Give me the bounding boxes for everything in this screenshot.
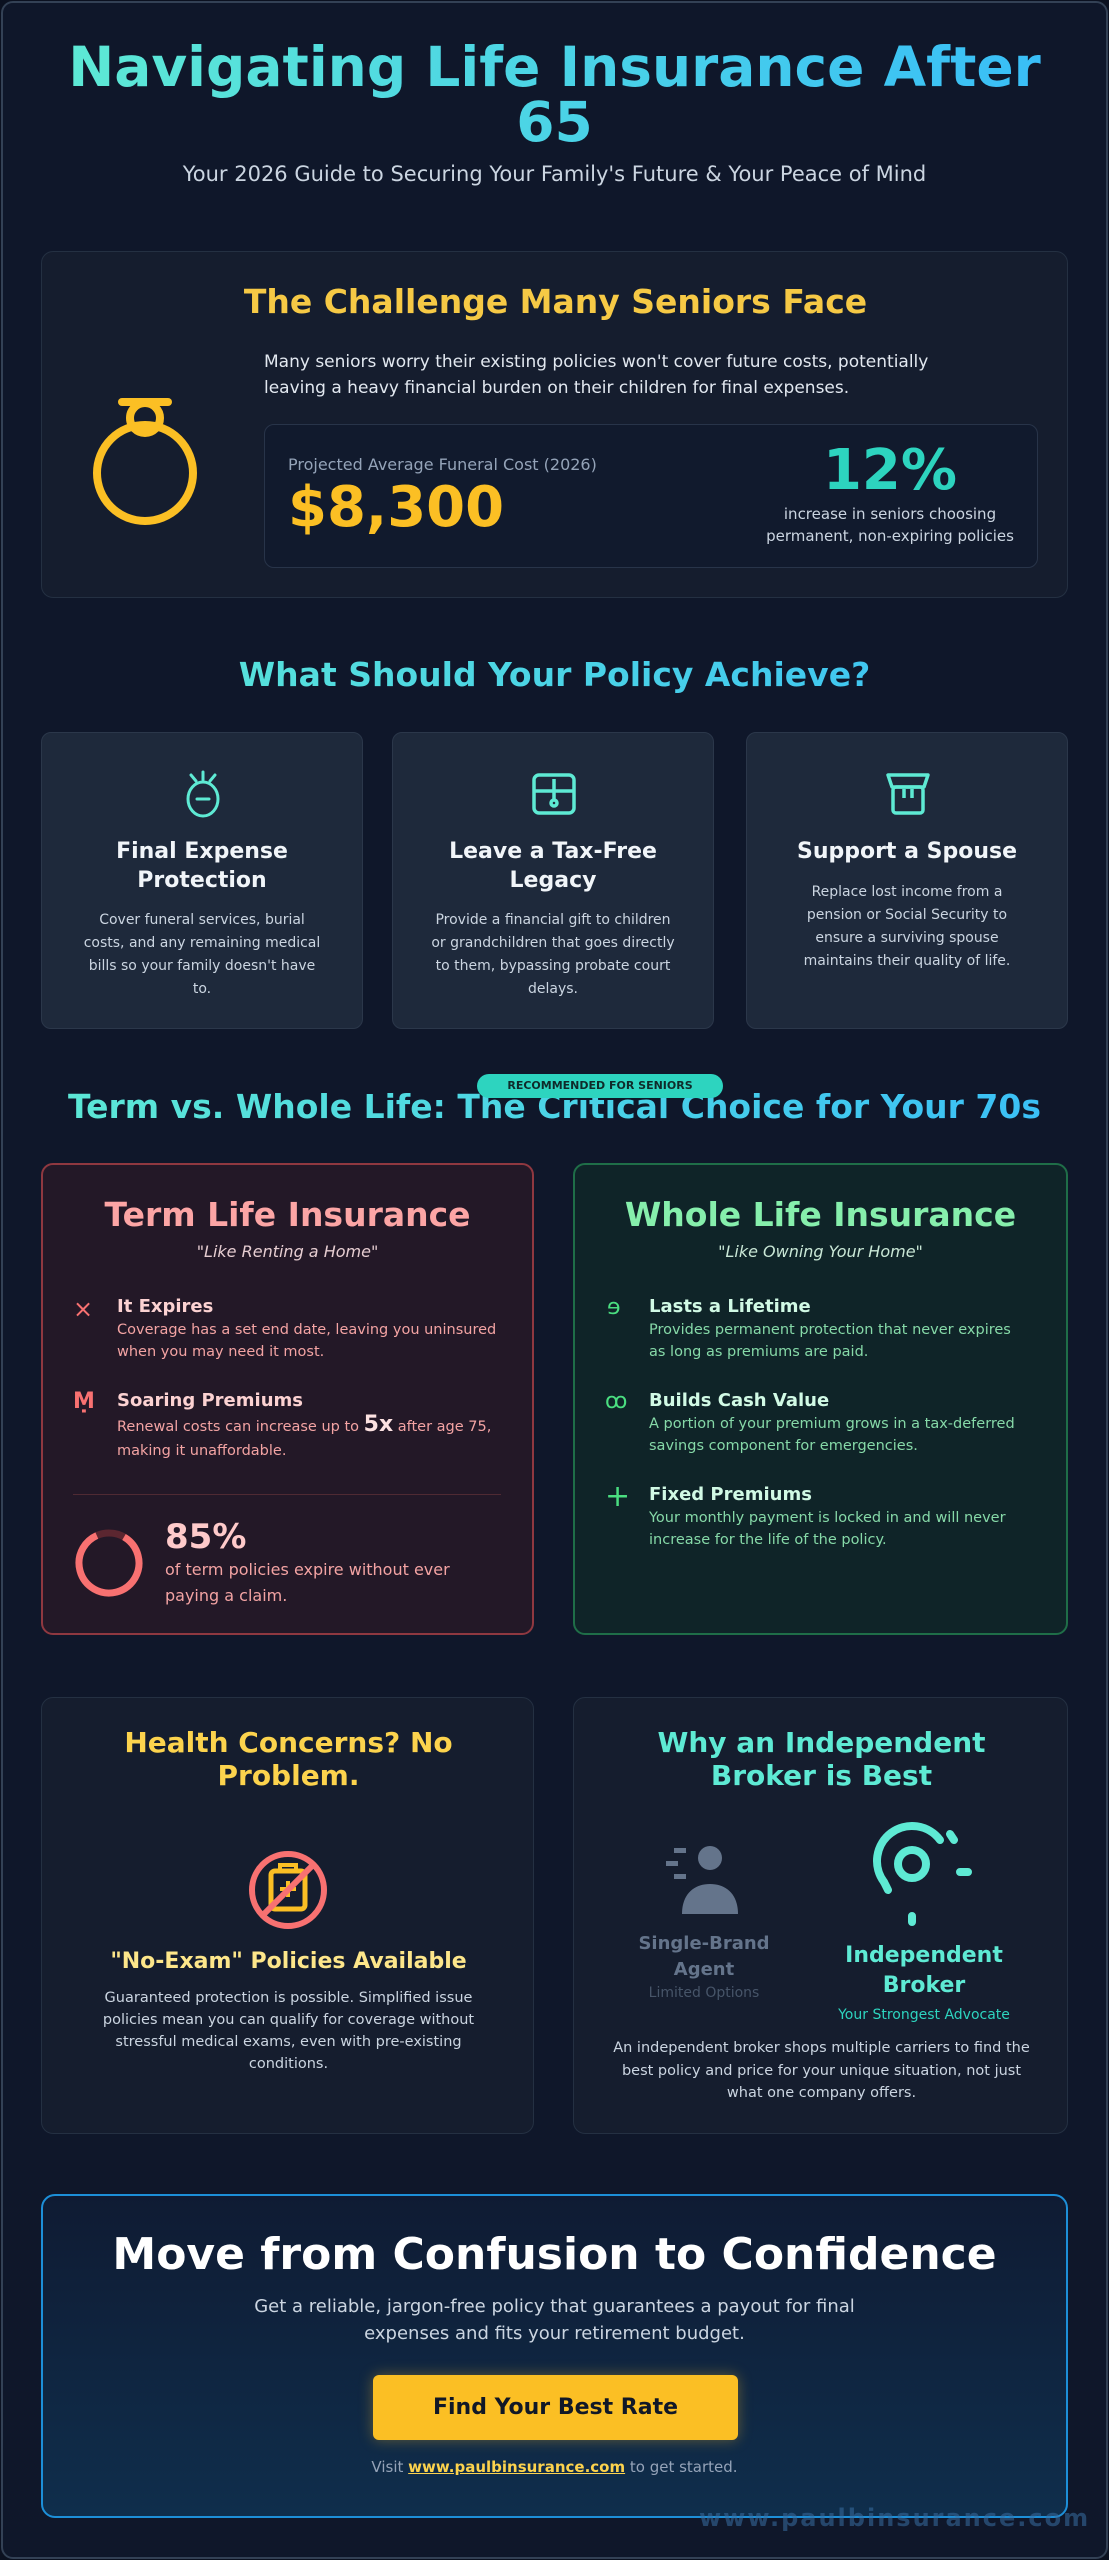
icon: lifetime: ɘ xyxy=(607,1295,621,1320)
heading: whole: Whole Life Insurance xyxy=(625,1195,1016,1234)
heading: term vs whole: Term vs. Whole Life: The Critical Choice for Your 70s xyxy=(68,1087,1041,1126)
stat: funeral cost: $8,300 xyxy=(288,475,504,540)
label: agent: Limited Options xyxy=(649,1985,759,2001)
button xyxy=(373,2375,738,2440)
text: cta: Get a reliable, jargon-free policy that guarantees a payout for final expenses and fits your retirement budget. xyxy=(254,2296,855,2344)
icon: premiums: Ṃ xyxy=(73,1389,95,1414)
stat: funeral cost xyxy=(288,455,597,540)
watermark: www.paulbinsurance.com xyxy=(699,2504,1090,2532)
item: fixed: Your monthly payment is locked in and will never increase for the life of the policy. xyxy=(649,1510,1006,1548)
panel: term life xyxy=(41,1163,534,1635)
badge: recommended: RECOMMENDED FOR SENIORS xyxy=(507,1079,693,1092)
panel: broker xyxy=(573,1697,1068,2134)
card: legacy xyxy=(392,732,714,1029)
panel: challenge xyxy=(41,251,1068,598)
icon: plus: + xyxy=(605,1479,630,1514)
heading: broker: Why an Independent Broker is Best xyxy=(657,1726,986,1792)
icon: cash: ꝏ xyxy=(605,1389,627,1414)
stat: 12%: 12% xyxy=(823,438,957,503)
heading: challenge: The Challenge Many Seniors Face xyxy=(244,282,867,321)
item: premiums: Soaring Premiums xyxy=(117,1390,303,1411)
item: expires: It Expires xyxy=(117,1296,213,1317)
heading: policy goals xyxy=(0,655,1109,694)
stat: 12%: increase in seniors choosing permanent, non-expiring policies xyxy=(766,505,1014,545)
icon: broker xyxy=(873,1822,972,1926)
heading: term: Term Life Insurance xyxy=(104,1195,471,1234)
item: fixed: Fixed Premiums xyxy=(649,1484,812,1505)
icon: agent xyxy=(666,1846,738,1914)
label: broker xyxy=(838,1943,1010,2023)
stat: 85%: 85% xyxy=(165,1517,246,1557)
item: cash value: A portion of your premium grows in a tax-deferred savings component for emergencies. xyxy=(649,1416,1015,1454)
item: cash value xyxy=(649,1390,1015,1454)
item: lifetime xyxy=(649,1296,1011,1360)
badge: recommended xyxy=(477,1074,723,1098)
subheading: no exam: "No-Exam" Policies Available xyxy=(110,1949,467,1974)
text: health: Guaranteed protection is possible. Simplified issue policies mean you can qualify for coverage without stressful medical exams, even with pre-existing conditions. xyxy=(103,1990,474,2072)
quote: term: "Like Renting a Home" xyxy=(197,1242,378,1261)
item: expires xyxy=(117,1296,496,1360)
card: spouse: Support a Spouse xyxy=(797,839,1017,864)
text: challenge description: Many seniors worry their existing policies won't cover future costs, potentially leaving a heavy financial burden on their children for final expenses. xyxy=(264,352,928,398)
stats box xyxy=(264,424,1038,568)
panel: health xyxy=(41,1697,534,2134)
card: final expense: Final Expense Protection xyxy=(116,839,288,893)
icon: x: × xyxy=(73,1295,93,1323)
item: cash value: Builds Cash Value xyxy=(649,1390,829,1411)
stat: 12% xyxy=(766,438,1014,545)
card: spouse: Replace lost income from a pension or Social Security to ensure a surviving spouse maintains their quality of life. xyxy=(804,884,1010,969)
item: expires: Coverage has a set end date, leaving you uninsured when you may need it most. xyxy=(117,1322,496,1360)
heading: cta: Move from Confusion to Confidence xyxy=(112,2229,997,2280)
label: broker: Broker xyxy=(883,1973,965,1998)
item: premiums xyxy=(117,1390,491,1459)
card: legacy: Leave a Tax-Free Legacy xyxy=(449,839,657,893)
panel: CTA xyxy=(41,2194,1068,2518)
card: spouse xyxy=(746,732,1068,1029)
card: final expense xyxy=(41,732,363,1029)
heading: health: Health Concerns? No Problem. xyxy=(124,1726,453,1792)
heading: policy goals: What Should Your Policy Achieve? xyxy=(239,655,870,694)
text: broker description: An independent broker shops multiple carriers to find the best policy and price for your unique situation, not just what one company offers. xyxy=(613,2040,1030,2101)
stat: 85%: of term policies expire without ever paying a claim. xyxy=(165,1560,450,1605)
card: legacy: Provide a financial gift to children or grandchildren that goes directly to them, bypassing probate court delays. xyxy=(431,912,675,997)
item: premiums: Renewal costs can increase up to 5x after age 75, making it unaffordable. xyxy=(117,1412,491,1459)
donut chart 85% xyxy=(75,1530,143,1597)
icon: spouse xyxy=(886,773,930,815)
title: Navigating Life Insurance After 65 xyxy=(68,35,1041,154)
card: final expense: Cover funeral services, burial costs, and any remaining medical bills so your family doesn't have to. xyxy=(84,912,320,997)
stat: 85% xyxy=(165,1517,450,1605)
button: Find Your Best Rate xyxy=(433,2395,678,2420)
icon: no exam xyxy=(249,1851,327,1929)
item: lifetime: Provides permanent protection that never expires as long as premiums are paid. xyxy=(649,1322,1011,1360)
label: agent xyxy=(638,1933,770,2001)
stat: funeral cost: Projected Average Funeral Cost (2026) xyxy=(288,455,597,474)
text: visit: Visit www.paulbinsurance.com to get started. xyxy=(371,2458,738,2476)
item: lifetime: Lasts a Lifetime xyxy=(649,1296,811,1317)
label: broker: Independent xyxy=(845,1943,1003,1968)
subtitle: Your 2026 Guide to Securing Your Family's Future & Your Peace of Mind xyxy=(183,162,926,186)
panel: whole life xyxy=(573,1163,1068,1635)
label: agent: Single-Brand xyxy=(638,1933,770,1954)
quote: whole: "Like Owning Your Home" xyxy=(718,1242,923,1261)
label: agent: Agent xyxy=(674,1959,734,1980)
icon: ring xyxy=(93,398,197,525)
icon: final expense xyxy=(186,770,220,818)
label: broker: Your Strongest Advocate xyxy=(838,2007,1010,2023)
item: fixed xyxy=(649,1484,1006,1548)
icon: legacy xyxy=(532,773,576,815)
